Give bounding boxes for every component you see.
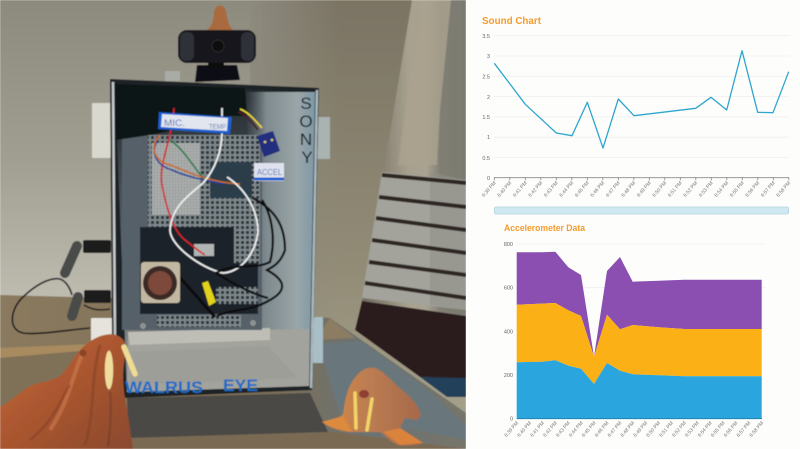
x axis labels (503, 420, 765, 439)
panel: dashboard background (466, 0, 800, 449)
y axis labels: 0.5 (482, 156, 490, 162)
cable on table (12, 279, 90, 334)
perforation above board (234, 220, 258, 263)
tiny walrus on webcam (207, 5, 233, 30)
antenna: lower (72, 290, 111, 316)
y axis labels: 3.5 (482, 34, 490, 40)
y axis labels: 1 (487, 135, 490, 141)
inner back plate (122, 135, 262, 330)
area: blue series (517, 360, 762, 419)
lower perforation strip (157, 315, 241, 327)
tusk right (124, 347, 135, 374)
accelerometer module (257, 131, 280, 157)
small walrus figurine (322, 368, 423, 446)
y axis labels: 2.5 (482, 74, 490, 80)
area: purple series (517, 252, 762, 357)
label: MIC / TEMP (158, 112, 232, 134)
breadboard (152, 143, 200, 215)
tray floor (127, 329, 309, 392)
screws (140, 320, 256, 330)
heading: Accelerometer Data: Accelerometer Data (504, 223, 586, 234)
x axis labels: 6:44 PM (558, 180, 575, 199)
computer board upper (210, 162, 252, 198)
x axis labels: 6:41 PM (529, 420, 546, 439)
heading: Sound Chart: Sound Chart (482, 15, 541, 27)
x axis labels: 6:43 PM (555, 420, 572, 439)
bracket: right lower (312, 317, 323, 363)
antenna: upper (65, 240, 111, 273)
x axis labels: 6:58 PM (749, 420, 765, 439)
wires: coloured (154, 108, 262, 255)
tusk left (105, 350, 113, 390)
wall behind vase (0, 0, 466, 449)
y axis labels: 800 (504, 242, 513, 248)
table top (0, 295, 466, 449)
label: MIC / TEMP: TEMP (209, 122, 226, 131)
shadow under box (127, 393, 328, 438)
x axis labels: 6:39 PM (481, 180, 498, 199)
perforation beside board (216, 287, 258, 304)
small bolt on top (165, 71, 180, 81)
x axis labels: 6:57 PM (760, 180, 777, 199)
small tusk right (367, 399, 372, 430)
x axis labels: 6:48 PM (620, 420, 636, 439)
panel: photo of the Walrus Eye device (0, 0, 466, 449)
large walrus figurine (0, 334, 135, 449)
SONY lettering: S (300, 94, 312, 113)
SONY lettering: O (299, 112, 313, 131)
wires: white (170, 108, 258, 273)
sound data line (494, 51, 789, 148)
bracket: left upper (92, 103, 115, 158)
x axis labels: 6:41 PM (512, 180, 529, 199)
SONY lettering: Y (301, 148, 313, 167)
computer board lower (140, 227, 258, 314)
wall transition (250, 0, 340, 320)
yellow connector (202, 281, 216, 306)
x axis labels: 6:54 PM (697, 420, 714, 439)
stacked area chart: accelerometer (503, 242, 765, 439)
x axis labels: 6:42 PM (542, 420, 559, 439)
enclosure (110, 79, 319, 398)
x axis labels: 6:56 PM (723, 420, 739, 439)
x axis labels: 6:56 PM (744, 180, 761, 199)
y axis labels: 0 (510, 417, 513, 423)
x axis labels: 6:45 PM (574, 180, 591, 199)
x axis labels: 6:40 PM (496, 180, 513, 199)
y axis labels: 2 (487, 95, 490, 101)
x axis labels (481, 180, 792, 199)
x axis labels: 6:51 PM (667, 180, 684, 199)
SONY lettering (299, 94, 313, 167)
x axis labels: 6:42 PM (527, 180, 544, 199)
x axis labels: 6:49 PM (632, 420, 649, 439)
line chart: sound (481, 34, 792, 199)
x axis labels: 6:53 PM (698, 180, 715, 199)
y axis labels: 0 (487, 176, 490, 182)
y axis labels: 600 (504, 286, 513, 292)
WALRUS EYE lettering: EYE (223, 376, 258, 395)
x axis labels: 6:48 PM (620, 180, 637, 199)
wall background (0, 0, 250, 320)
y axis labels: 3 (487, 54, 490, 60)
WALRUS EYE lettering: WALRUS (125, 378, 203, 397)
table plank highlights (0, 344, 92, 358)
WALRUS EYE lettering (125, 376, 258, 397)
perforated plate (148, 135, 260, 265)
x axis labels: 6:44 PM (568, 420, 585, 439)
bracket: left lower (91, 318, 115, 342)
area: orange series (517, 303, 762, 384)
x axis labels: 6:50 PM (645, 420, 662, 439)
x axis labels: 6:39 PM (503, 420, 520, 439)
range slider (494, 207, 788, 214)
label: ACCEL: ACCEL (257, 167, 282, 177)
label: ACCEL (254, 163, 284, 181)
vase (355, 0, 466, 397)
x axis labels: 6:46 PM (594, 420, 610, 439)
label: MIC / TEMP: MIC. (164, 118, 185, 129)
x axis labels: 6:58 PM (775, 180, 792, 199)
top black mount (115, 84, 247, 140)
cooling fan (141, 262, 180, 303)
SONY lettering: N (300, 130, 312, 149)
enclosure left highlight (113, 82, 115, 340)
x axis labels: 6:52 PM (682, 180, 699, 199)
x axis labels: 6:43 PM (543, 180, 560, 199)
x axis labels: 6:40 PM (516, 420, 533, 439)
y axis labels: 400 (504, 329, 513, 335)
enclosure right edge (311, 90, 317, 388)
heatsink module (194, 244, 214, 256)
x axis labels: 6:45 PM (581, 420, 597, 439)
x axis labels: 6:55 PM (729, 180, 746, 199)
webcam (178, 30, 256, 82)
bracket: right upper (317, 117, 330, 159)
x axis labels: 6:52 PM (671, 420, 688, 439)
x axis labels: 6:55 PM (710, 420, 726, 439)
x axis labels: 6:51 PM (658, 420, 675, 439)
x axis labels: 6:57 PM (736, 420, 752, 439)
x axis labels: 6:47 PM (605, 180, 622, 199)
x axis labels: 6:47 PM (607, 420, 623, 439)
x axis labels: 6:46 PM (589, 180, 606, 199)
y axis labels (482, 34, 490, 182)
table blue-grey area (318, 342, 466, 440)
x axis labels: 6:49 PM (636, 180, 653, 199)
small tusk left (355, 393, 356, 428)
x axis labels: 6:50 PM (651, 180, 668, 199)
wires: black (167, 198, 285, 317)
x axis labels: 6:54 PM (713, 180, 730, 199)
x axis labels: 6:53 PM (684, 420, 701, 439)
y axis labels (504, 242, 513, 423)
y axis labels: 200 (504, 373, 513, 379)
y axis labels: 1.5 (482, 115, 490, 121)
